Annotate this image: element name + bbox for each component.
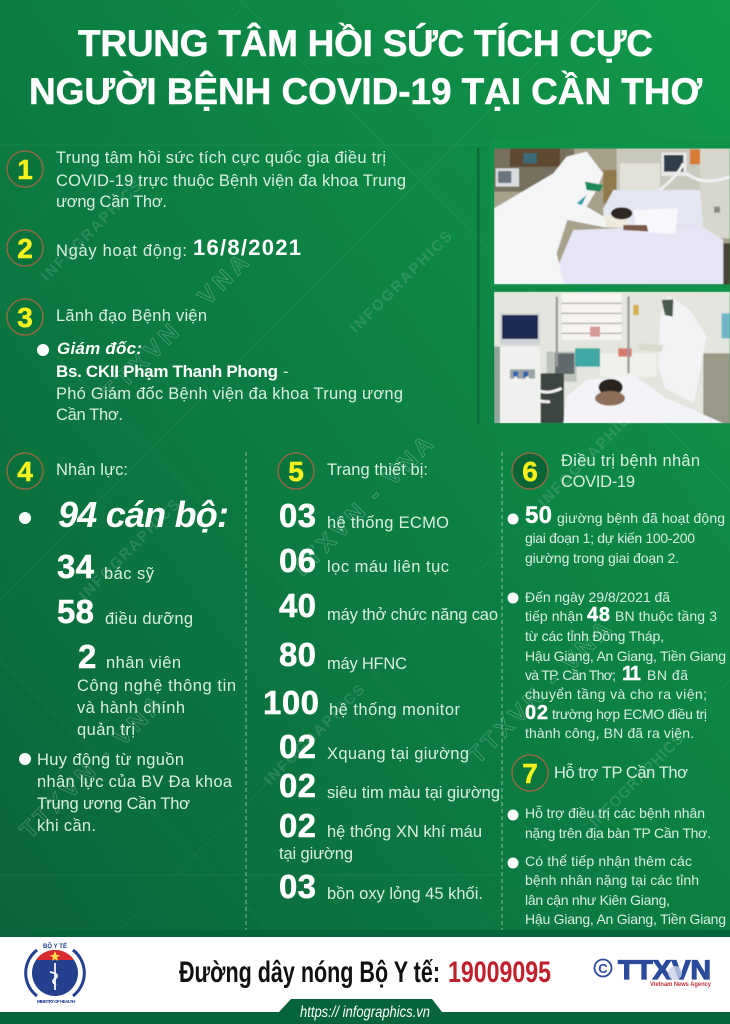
section 2: operating date: 2 [17,233,33,264]
section 3: hospital leadership: Cần Thơ. [56,406,123,424]
section 7: support for Can Tho: lân cận như Kiên Giang, [525,892,670,908]
section 7: support for Can Tho: Có thể tiếp nhận thêm các [525,853,692,869]
section 6: patient treatment: trường hợp ECMO điều trị [552,706,707,722]
section 4: staffing [7,453,236,835]
section 5: equipment: 03 [279,868,316,905]
logo: TTXVN: TTXVN [618,955,711,985]
section 6: patient treatment: giường bệnh đã hoạt động [557,510,725,526]
section 7: support for Can Tho: nặng trên địa bàn TP Cần Thơ. [525,825,711,841]
section 5: equipment: máy thở chức năng cao [327,606,498,624]
footer band [0,930,730,1024]
icon: ministry of health logo: BỘ Y TẾ [43,942,67,950]
section 4: staffing: Nhân lực: [56,461,128,479]
section 1: national ICU: 1 [17,154,33,185]
section 5: equipment: máy HFNC [327,655,407,673]
section 5: equipment: 40 [279,587,316,624]
section 5: equipment: 80 [279,636,316,673]
title: TRUNG TÂM HỒI SỨC TÍCH CỰC [78,22,653,64]
section 6: patient treatment: chuyển tầng và cho ra viện; [525,686,707,702]
section 6: patient treatment: giai đoạn 1; dự kiến 100-200 [525,530,695,546]
section 6: patient treatment: 6 [522,456,538,487]
section 6: patient treatment [508,452,726,741]
hotline: Đường dây nóng Bộ Y tế: [179,956,440,989]
section 6: patient treatment: Hậu Giang, An Giang, Tiền Giang [525,648,726,664]
section 4: staffing: bác sỹ [104,565,155,583]
section 3: hospital leadership: 3 [17,302,33,333]
watermarks: INFOGRAPHICS [347,228,456,337]
section 2: operating date [7,230,301,266]
section 5: equipment: hệ thống monitor [329,701,460,719]
section 4: staffing: và hành chính [77,699,185,717]
section 4: staffing: 94 cán bộ: [58,494,229,535]
section 3: hospital leadership: Lãnh đạo Bệnh viện [56,307,207,325]
section 5: equipment: 03 [279,497,316,534]
section 6: patient treatment: 02 [525,702,548,724]
section 5: equipment: Xquang tại giường [327,745,469,763]
section 7: support for Can Tho: bệnh nhân nặng tại các tỉnh [525,872,699,888]
logo: TTXVN: Vietnam News Agency [650,981,711,988]
section 6: patient treatment: thành công, BN đã ra viện. [525,725,694,741]
section 5: equipment: 100 [263,684,319,721]
section 4: staffing: quản trị [77,721,135,739]
section 4: staffing: 2 [78,638,96,675]
title [29,22,702,112]
section 5: equipment [263,453,500,905]
section 6: patient treatment: tiếp nhận [525,608,583,624]
watermarks [15,177,687,844]
photo: ventilator and patient [494,292,730,423]
photo: doctor in protective suit at bedside [490,140,730,287]
watermarks: TTXVN - VNA [15,691,169,844]
watermarks: INFOGRAPHICS [76,496,183,604]
section 6: patient treatment: 11 [622,663,641,685]
section 5: equipment: bồn oxy lỏng 45 khối. [327,885,483,903]
section 6: patient treatment: giường trong giai đoạn 2. [525,550,679,566]
section 5: equipment: 02 [279,807,316,844]
section 5: equipment: siêu tim màu tại giường [327,784,500,802]
watermarks: TTXVN - VNA [97,249,254,406]
section 3: hospital leadership: Giám đốc: [57,339,142,358]
section 5: equipment: tại giường [279,845,353,863]
section 6: patient treatment: COVID-19 [561,473,635,491]
section 5: equipment: 02 [279,728,316,765]
logo: TTXVN [594,955,711,988]
section 6: patient treatment: 48 [587,604,610,626]
watermarks: INFOGRAPHICS [587,730,687,831]
section 4: staffing: 58 [57,593,94,630]
section 5: equipment: lọc máu liên tục [327,558,449,576]
section 4: staffing: điều dưỡng [105,610,193,628]
section 1: national ICU [7,149,406,211]
section 2: operating date: 16/8/2021 [193,235,301,260]
section 7: support for Can Tho: 7 [522,758,538,789]
section 7: support for Can Tho: Hậu Giang, An Giang, Tiền Giang [525,911,726,927]
section 3: hospital leadership: Phó Giám đốc Bệnh viện đa khoa Trung ương [56,385,403,403]
section 5: equipment: 5 [288,456,304,487]
section 6: patient treatment: BN đã [647,667,688,683]
section 4: staffing: 34 [57,548,95,585]
section 4: staffing: 4 [17,456,33,487]
website tab [279,999,442,1024]
watermarks: INFOGRAPHICS [535,403,642,511]
section 3: hospital leadership: - [283,363,288,381]
section 5: equipment: hệ thống ECMO [327,514,449,532]
section 6: patient treatment: từ các tỉnh Đồng Tháp, [525,628,664,644]
section 7: support for Can Tho: Hỗ trợ điều trị các bệnh nhân [525,805,705,821]
section 4: staffing: khi cần. [37,817,96,835]
watermarks: INFOGRAPHICS [38,177,145,285]
section 6: patient treatment: Điều trị bệnh nhân [561,452,700,470]
section 1: national ICU: Trung tâm hồi sức tích cực quốc gia điều trị [56,149,386,167]
section 5: equipment: Trang thiết bị: [327,461,428,479]
watermarks: TTXVN - VNA [463,616,617,769]
section 1: national ICU: COVID-19 trực thuộc Bệnh viện đa khoa Trung [56,172,406,190]
section 7: support for Can Tho: Hỗ trợ TP Cần Thơ [554,763,688,782]
section 1: national ICU: ương Cần Thơ. [56,193,167,211]
section 4: staffing: Huy động từ nguồn [37,751,184,769]
watermarks: INFOGRAPHICS [261,681,368,789]
logo: TTXVN: C [598,961,608,976]
section 4: staffing: nhân viên [106,654,181,672]
section 4: staffing: Công nghệ thông tin [77,677,236,695]
icon: ministry of health logo [26,942,84,1004]
section 4: staffing: Trung ương Cần Thơ [37,795,190,813]
hotline: 19009095 [448,956,551,989]
section 5: equipment: 06 [279,542,316,579]
section 7: support for Can Tho [508,755,726,927]
section 4: staffing: nhân lực của BV Đa khoa [37,773,233,791]
section 6: patient treatment: BN thuộc tầng 3 [615,608,717,624]
website tab: https:// infographics.vn [300,1004,430,1021]
section 6: patient treatment: 50 [525,502,552,529]
section 3: hospital leadership [7,299,403,424]
section 2: operating date: Ngày hoạt động: [56,242,187,260]
section 3: hospital leadership: Bs. CKII Phạm Thanh Phong [56,362,278,381]
section 5: equipment: hệ thống XN khí máu [327,823,482,841]
section 6: patient treatment: Đến ngày 29/8/2021 đã [525,589,670,605]
title: NGƯỜI BỆNH COVID-19 TẠI CẦN THƠ [29,70,702,112]
icon: ministry of health logo: MINISTRY OF HEALTH [37,999,75,1004]
section 5: equipment: 02 [279,767,316,804]
section 6: patient treatment: và TP. Cần Thơ; [525,667,616,683]
watermarks: TTXVN - VNA [285,431,439,584]
